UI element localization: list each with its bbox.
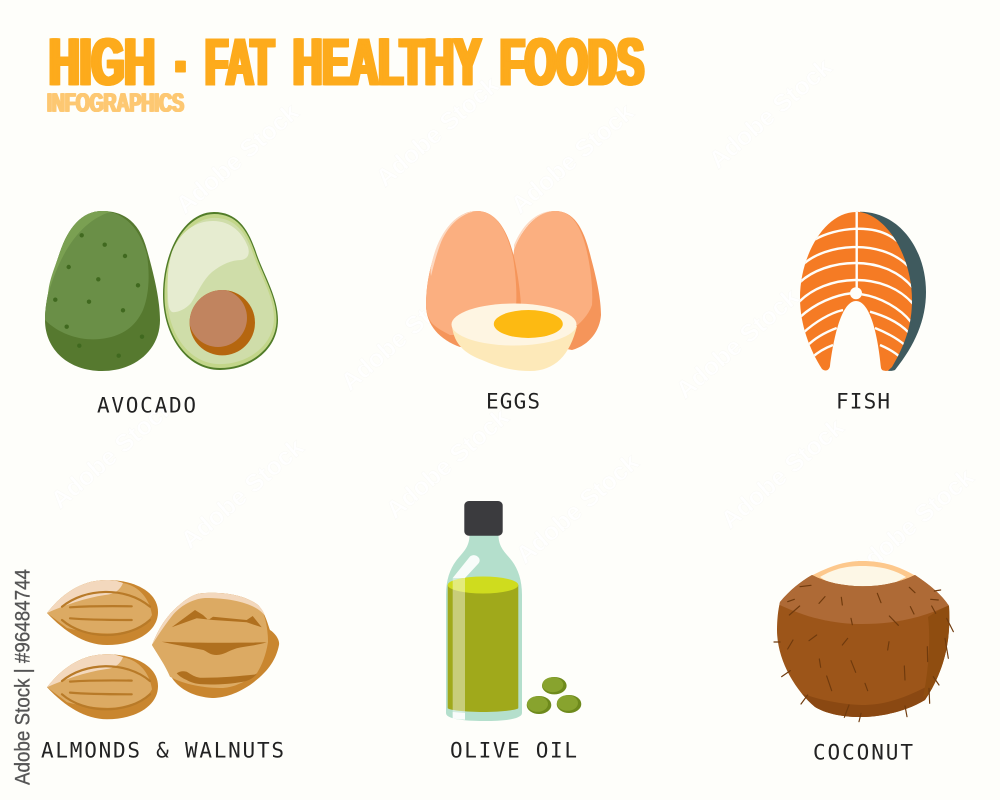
icon: almonds and walnut (47, 580, 279, 719)
almond bottom (47, 654, 158, 719)
almond top (47, 580, 158, 645)
text: Adobe Stock (511, 448, 644, 570)
label: coconut: COCONUT (813, 740, 913, 764)
label: eggs: EGGS (486, 390, 540, 414)
text: Adobe Stock (381, 403, 514, 525)
stock id text: Adobe Stock | #96484744 (12, 569, 34, 785)
text: Adobe Stock (704, 53, 837, 175)
text: Adobe Stock (716, 413, 849, 535)
subtitle: INFOGRAPHICS (47, 90, 184, 118)
walnut (152, 593, 279, 698)
title: FAT (205, 24, 274, 98)
title: HEALTHY (293, 24, 481, 98)
title: HIGH (49, 24, 155, 98)
icon: olive oil bottle (446, 501, 581, 721)
label: fish: FISH (836, 390, 890, 414)
title: FOODS (500, 24, 644, 98)
text: Adobe Stock (671, 283, 804, 405)
label: almonds and walnuts: ALMONDS & WALNUTS (41, 738, 284, 762)
text: Adobe Stock (336, 275, 469, 397)
title (49, 24, 644, 98)
text: Adobe Stock (46, 393, 179, 515)
icon: coconut (770, 555, 960, 725)
text: Adobe Stock (371, 71, 504, 193)
label: avocado: AVOCADO (97, 394, 196, 418)
text: Adobe Stock (171, 98, 304, 220)
title: - (176, 24, 185, 98)
text: Adobe Stock (846, 463, 979, 585)
label: olive oil: OLIVE OIL (450, 738, 577, 762)
text: Adobe Stock (176, 433, 309, 555)
olives (527, 677, 581, 714)
icon: fish steak (798, 211, 926, 371)
icon: eggs (426, 211, 601, 371)
text: Adobe Stock (506, 98, 639, 220)
bottle cap (464, 501, 503, 536)
icon: avocado (45, 211, 278, 371)
